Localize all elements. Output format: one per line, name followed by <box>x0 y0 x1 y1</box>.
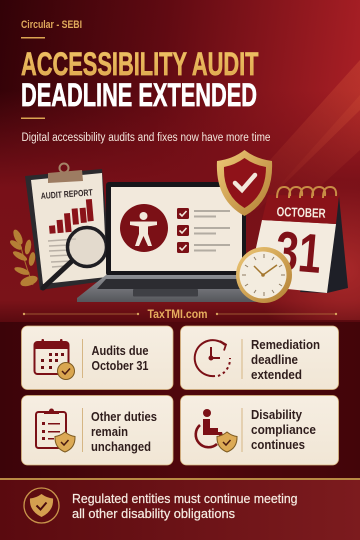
eyebrow: Circular - SEBI: Circular - SEBI <box>21 19 82 31</box>
footer banner <box>0 478 360 540</box>
card label: Audits due <box>92 344 149 358</box>
illustration: laptop <box>77 182 262 302</box>
title: ACCESSIBILITY AUDIT <box>21 46 259 82</box>
icon: gold shield with check <box>217 150 272 216</box>
calendar month: OCTOBER <box>276 204 326 221</box>
card label: extended <box>251 368 302 382</box>
icon: wheelchair with shield <box>196 409 237 452</box>
checklist <box>177 208 230 253</box>
brand strip: TaxTMI.com: TaxTMI.com <box>148 309 208 321</box>
icon: clipboard with shield <box>36 409 75 452</box>
footer text: Regulated entities must continue meeting <box>72 491 298 506</box>
card label: Disability <box>251 408 302 422</box>
footer text <box>72 491 298 521</box>
card label <box>251 408 316 452</box>
icon: clock with arrow <box>195 340 230 376</box>
card label <box>91 410 157 454</box>
card label <box>251 338 320 382</box>
accessibility symbol <box>120 204 168 252</box>
illustration: audit report clipboard <box>25 164 112 290</box>
panel: disability compliance <box>180 396 338 465</box>
card label <box>92 344 149 373</box>
accent rule <box>21 118 45 119</box>
card label: October 31 <box>92 359 149 373</box>
title <box>21 46 259 113</box>
icon: footer shield <box>24 488 59 523</box>
calendar rings <box>277 187 336 198</box>
magnifying glass <box>43 228 106 288</box>
subtitle: Digital accessibility audits and fixes now have more time <box>22 132 270 144</box>
panel: remediation deadline <box>180 326 338 390</box>
card label: deadline <box>251 353 298 367</box>
card label: remain <box>91 425 128 439</box>
report text lines <box>48 239 76 267</box>
calendar date: 31 <box>273 219 324 285</box>
icon: calendar with check <box>34 339 74 380</box>
panel: audits due <box>22 326 173 390</box>
clipboard clip <box>48 164 83 183</box>
card label: compliance <box>251 423 316 437</box>
illustration: clock <box>236 247 292 303</box>
panel: other duties <box>22 396 173 465</box>
report bar chart <box>47 199 95 234</box>
footer text: all other disability obligations <box>72 506 235 521</box>
illustration: calendar <box>248 187 348 293</box>
report heading: AUDIT REPORT <box>40 187 93 201</box>
title: DEADLINE EXTENDED <box>21 77 257 113</box>
accent rule <box>21 37 45 38</box>
card label: Other duties <box>91 410 157 424</box>
card label: Remediation <box>251 338 320 352</box>
card label: unchanged <box>91 440 151 454</box>
card label: continues <box>251 438 305 452</box>
icon: laurel <box>9 228 39 288</box>
